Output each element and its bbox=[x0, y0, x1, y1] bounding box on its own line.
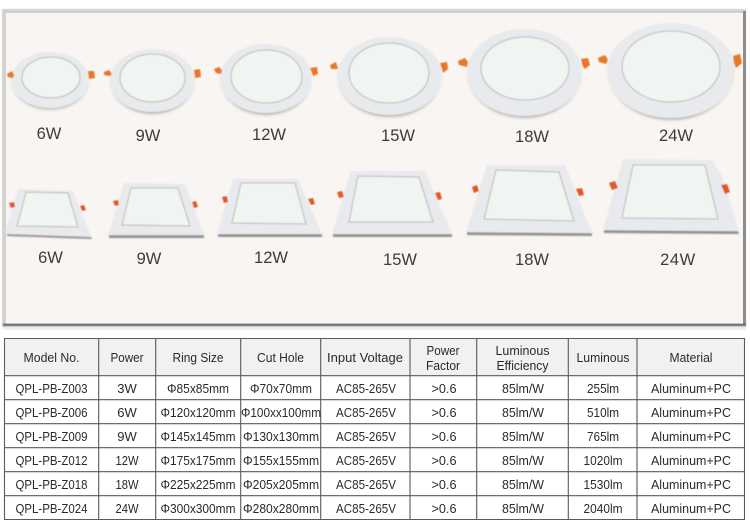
table row QPL-PB-Z003: 85lm/W bbox=[502, 381, 545, 396]
table row QPL-PB-Z012 bbox=[16, 453, 731, 468]
table header row: Cut Hole bbox=[257, 350, 304, 365]
square panel 18W bbox=[466, 165, 592, 236]
table header row: Luminous bbox=[576, 350, 630, 365]
table row QPL-PB-Z009 bbox=[16, 429, 731, 444]
table row QPL-PB-Z012: Aluminum+PC bbox=[651, 453, 731, 468]
table row QPL-PB-Z024: 85lm/W bbox=[502, 501, 545, 516]
table row QPL-PB-Z003: Φ85x85mm bbox=[167, 381, 229, 396]
table row QPL-PB-Z009: >0.6 bbox=[432, 429, 456, 444]
label: 18W square: 18W bbox=[515, 251, 549, 269]
label: 9W round: 9W bbox=[136, 127, 161, 145]
label: 12W square: 12W bbox=[254, 249, 288, 267]
table row QPL-PB-Z003: QPL-PB-Z003 bbox=[16, 381, 88, 396]
round panel 6W bbox=[7, 52, 95, 109]
table row QPL-PB-Z009: Aluminum+PC bbox=[651, 429, 731, 444]
table row QPL-PB-Z009: 85lm/W bbox=[502, 429, 545, 444]
table row QPL-PB-Z006: >0.6 bbox=[432, 405, 456, 420]
table row QPL-PB-Z018: 18W bbox=[116, 477, 139, 492]
table row QPL-PB-Z024: AC85-265V bbox=[336, 501, 396, 516]
label: 24W square: 24W bbox=[660, 251, 696, 269]
round panel 12W bbox=[214, 44, 318, 114]
table row QPL-PB-Z006: Φ120x120mm bbox=[160, 405, 236, 420]
table row QPL-PB-Z009: QPL-PB-Z009 bbox=[16, 429, 88, 444]
table row QPL-PB-Z012: QPL-PB-Z012 bbox=[16, 453, 88, 468]
table row QPL-PB-Z003: Φ70x70mm bbox=[250, 381, 312, 396]
round panel 15W bbox=[330, 37, 448, 116]
table row QPL-PB-Z018: >0.6 bbox=[432, 477, 456, 492]
table row QPL-PB-Z024: 2040lm bbox=[584, 501, 622, 516]
table row QPL-PB-Z009: 765lm bbox=[587, 429, 619, 444]
table row QPL-PB-Z006: 6W bbox=[117, 405, 137, 420]
label: 15W round: 15W bbox=[381, 127, 415, 145]
table header row: Material bbox=[670, 350, 713, 365]
table header row bbox=[24, 343, 713, 373]
table header row: Efficiency bbox=[496, 358, 549, 373]
label: 15W square: 15W bbox=[383, 251, 417, 269]
table row QPL-PB-Z012: 85lm/W bbox=[502, 453, 545, 468]
table header row: Power bbox=[426, 343, 460, 358]
table row QPL-PB-Z009: 9W bbox=[117, 429, 137, 444]
table row QPL-PB-Z012: 12W bbox=[116, 453, 139, 468]
table header row: Luminous bbox=[496, 343, 550, 358]
square panel 9W bbox=[108, 183, 204, 238]
table row QPL-PB-Z009: Φ145x145mm bbox=[160, 429, 236, 444]
label: 6W round: 6W bbox=[37, 125, 62, 143]
square panel 15W bbox=[332, 171, 452, 237]
table header background bbox=[4, 338, 744, 376]
table row QPL-PB-Z006: QPL-PB-Z006 bbox=[16, 405, 88, 420]
table row QPL-PB-Z006: Φ100xx100mm bbox=[241, 405, 321, 420]
table row QPL-PB-Z012: AC85-265V bbox=[336, 453, 396, 468]
label: 24W round: 24W bbox=[659, 127, 693, 145]
table header row: Model No. bbox=[24, 350, 80, 365]
label: 12W round: 12W bbox=[252, 126, 286, 144]
table row QPL-PB-Z024 bbox=[16, 501, 731, 516]
table row QPL-PB-Z012: 1020lm bbox=[584, 453, 622, 468]
table row QPL-PB-Z003: 255lm bbox=[587, 381, 619, 396]
table header row: Factor bbox=[426, 358, 461, 373]
panel: product photo frame bbox=[2, 9, 746, 330]
table row QPL-PB-Z024: Φ300x300mm bbox=[160, 501, 236, 516]
table row QPL-PB-Z024: 24W bbox=[116, 501, 139, 516]
round panel 18W bbox=[458, 29, 590, 118]
table row QPL-PB-Z006: Aluminum+PC bbox=[651, 405, 731, 420]
table row QPL-PB-Z003 bbox=[16, 381, 731, 396]
table row QPL-PB-Z006 bbox=[16, 405, 731, 420]
table row QPL-PB-Z012: Φ155x155mm bbox=[243, 453, 319, 468]
table row QPL-PB-Z009: Φ130x130mm bbox=[243, 429, 319, 444]
table row QPL-PB-Z006: AC85-265V bbox=[336, 405, 396, 420]
table row QPL-PB-Z012: >0.6 bbox=[432, 453, 456, 468]
table row QPL-PB-Z018: AC85-265V bbox=[336, 477, 396, 492]
round panel 24W bbox=[598, 23, 742, 120]
square panel 24W bbox=[603, 159, 739, 234]
table row QPL-PB-Z018: QPL-PB-Z018 bbox=[16, 477, 88, 492]
label: 18W round: 18W bbox=[515, 128, 549, 146]
specification table bbox=[4, 338, 744, 520]
table row QPL-PB-Z003: AC85-265V bbox=[336, 381, 396, 396]
table row QPL-PB-Z018 bbox=[16, 477, 731, 492]
label: 6W square: 6W bbox=[38, 249, 63, 267]
round panel 9W bbox=[104, 49, 201, 114]
square panel 6W bbox=[5, 189, 92, 239]
table row QPL-PB-Z018: 1530lm bbox=[584, 477, 622, 492]
table row QPL-PB-Z006: 510lm bbox=[587, 405, 619, 420]
table row QPL-PB-Z006: 85lm/W bbox=[502, 405, 545, 420]
table row QPL-PB-Z018: 85lm/W bbox=[502, 477, 545, 492]
table row QPL-PB-Z003: >0.6 bbox=[432, 381, 456, 396]
table row QPL-PB-Z024: >0.6 bbox=[432, 501, 456, 516]
label: 9W square: 9W bbox=[137, 250, 162, 268]
table row QPL-PB-Z018: Aluminum+PC bbox=[651, 477, 731, 492]
table row QPL-PB-Z024: QPL-PB-Z024 bbox=[16, 501, 88, 516]
table row QPL-PB-Z003: Aluminum+PC bbox=[651, 381, 731, 396]
table row QPL-PB-Z009: AC85-265V bbox=[336, 429, 396, 444]
table grid bbox=[4, 338, 744, 520]
table row QPL-PB-Z003: 3W bbox=[117, 381, 137, 396]
table row QPL-PB-Z024: Φ280x280mm bbox=[243, 501, 319, 516]
table header row: Power bbox=[110, 350, 144, 365]
table header row: Ring Size bbox=[172, 350, 224, 365]
table row QPL-PB-Z024: Aluminum+PC bbox=[651, 501, 731, 516]
table header row: Input Voltage bbox=[327, 350, 403, 365]
table row QPL-PB-Z012: Φ175x175mm bbox=[160, 453, 236, 468]
table row QPL-PB-Z018: Φ225x225mm bbox=[160, 477, 236, 492]
square panel 12W bbox=[217, 179, 322, 237]
table row QPL-PB-Z018: Φ205x205mm bbox=[243, 477, 319, 492]
